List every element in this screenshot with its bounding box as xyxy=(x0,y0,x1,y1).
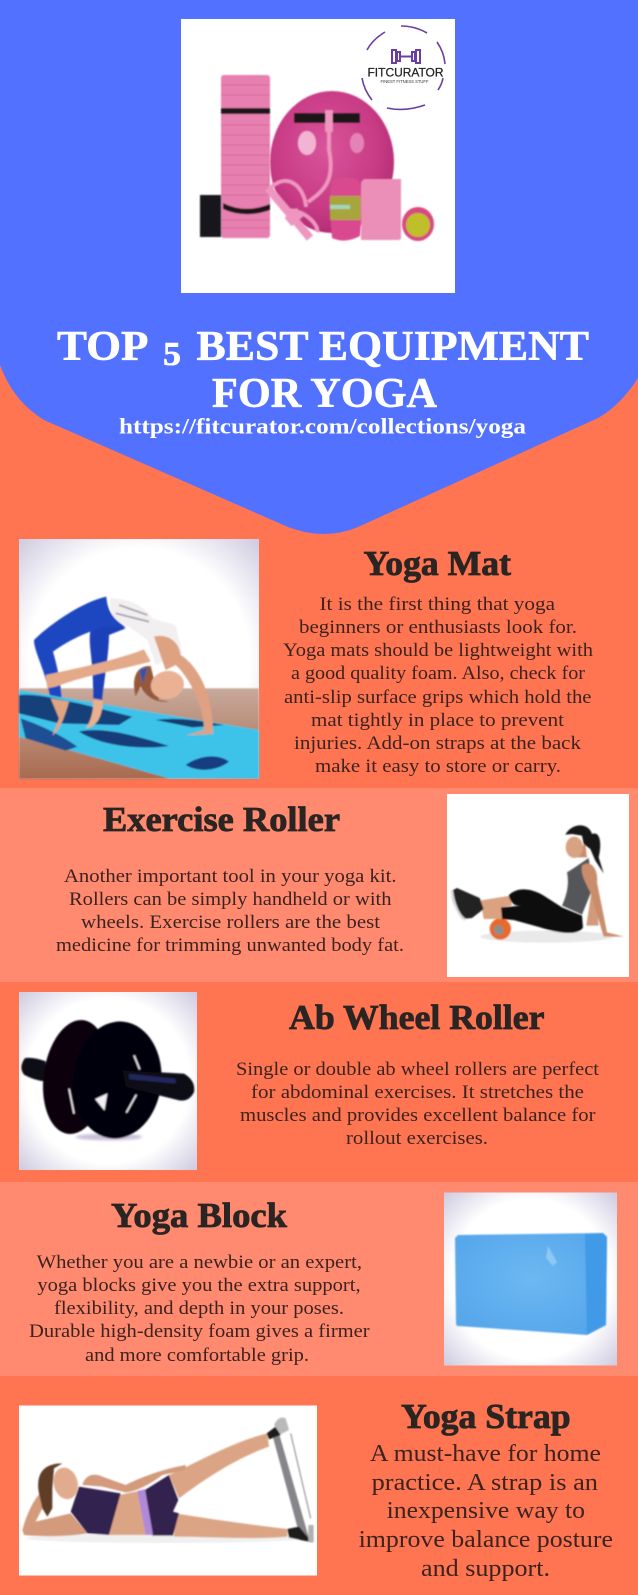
body: yoga mat: injuries. Add-on straps at the back xyxy=(294,733,582,754)
title: FOR YOGA xyxy=(212,370,437,417)
body: yoga block: flexibility, and depth in your poses. xyxy=(54,1298,344,1319)
heading: yoga strap: Yoga Strap xyxy=(401,1397,571,1436)
body: yoga mat: anti-slip surface grips which hold the xyxy=(284,687,592,708)
band: exercise roller background xyxy=(0,788,638,982)
icon: small ball case xyxy=(402,207,434,241)
body: yoga mat: mat tightly in place to prevent xyxy=(311,710,565,731)
body: yoga block: yoga blocks give you the extra support, xyxy=(37,1275,361,1296)
body: exercise roller: Rollers can be simply handheld or with xyxy=(69,889,392,910)
body: yoga mat: beginners or enthusiasts look for. xyxy=(299,617,577,638)
photo: exercise roller seated woman xyxy=(447,794,629,977)
panel: yoga block xyxy=(29,1192,617,1366)
heading: ab wheel roller: Ab Wheel Roller xyxy=(289,998,544,1037)
panel: exercise roller xyxy=(56,794,629,977)
title: 5 xyxy=(163,336,181,373)
photo: yoga mat backbend xyxy=(19,539,259,779)
body: yoga mat: make it easy to store or carry. xyxy=(315,756,561,777)
icon: exercise ball xyxy=(270,91,394,233)
heading: yoga block: Yoga Block xyxy=(111,1196,288,1235)
body: yoga strap: and support. xyxy=(421,1556,550,1582)
heading: yoga mat: Yoga Mat xyxy=(364,544,511,583)
body: ab wheel roller: muscles and provides excellent balance for xyxy=(240,1105,596,1126)
body: exercise roller: wheels. Exercise rollers are the best xyxy=(81,912,381,933)
icon: pedal resistance puller xyxy=(268,110,333,238)
body: yoga block: Whether you are a newbie or an expert, xyxy=(37,1252,362,1273)
photo: blue yoga block xyxy=(444,1192,617,1366)
logo: fitcurator: FITCURATOR xyxy=(368,66,444,80)
photo: ab wheel xyxy=(19,992,197,1170)
header product photo xyxy=(181,19,455,293)
logo: fitcurator xyxy=(362,26,445,109)
body: exercise roller xyxy=(56,866,404,956)
body: yoga strap xyxy=(359,1441,613,1582)
body: yoga block: Durable high-density foam gives a firmer xyxy=(29,1321,370,1342)
title: BEST EQUIPMENT xyxy=(196,323,589,370)
body: yoga mat xyxy=(283,594,594,777)
body: ab wheel roller: for abdominal exercises. It stretches the xyxy=(251,1082,584,1103)
body: yoga block xyxy=(29,1252,370,1366)
body: yoga strap: A must-have for home xyxy=(370,1441,601,1467)
body: ab wheel roller: Single or double ab wheel rollers are perfect xyxy=(236,1059,600,1080)
title: TOP xyxy=(57,323,148,370)
logo: fitcurator: FINEST FITNESS STUFF xyxy=(380,79,429,84)
icon: black wrap xyxy=(200,195,221,237)
body: ab wheel roller: rollout exercises. xyxy=(346,1128,488,1149)
icon: yoga block xyxy=(361,179,401,240)
url: https://fitcurator.com/collections/yoga xyxy=(119,414,526,438)
photo: yoga strap side-lying woman xyxy=(19,1406,317,1576)
body: yoga strap: improve balance posture xyxy=(359,1527,613,1553)
icon: rolled towel xyxy=(329,178,364,241)
body: yoga mat: It is the first thing that yoga xyxy=(320,594,556,615)
body: ab wheel roller xyxy=(236,1059,600,1149)
body: yoga strap: inexpensive way to xyxy=(387,1498,585,1524)
body: yoga strap: practice. A strap is an xyxy=(372,1470,598,1496)
body: exercise roller: medicine for trimming unwanted body fat. xyxy=(56,935,404,956)
title xyxy=(57,323,589,417)
body: yoga mat: a good quality foam. Also, check for xyxy=(291,663,586,684)
header: blue pennant shape xyxy=(0,0,638,534)
body: yoga block: and more comfortable grip. xyxy=(85,1345,309,1366)
heading: exercise roller: Exercise Roller xyxy=(103,800,340,839)
band: yoga block background xyxy=(0,1182,638,1376)
panel: yoga mat xyxy=(19,539,594,779)
body: yoga mat: Yoga mats should be lightweight with xyxy=(283,640,594,661)
body: exercise roller: Another important tool in your yoga kit. xyxy=(64,866,396,887)
panel: yoga strap xyxy=(19,1397,613,1582)
panel: ab wheel roller xyxy=(19,992,600,1170)
icon: rolled yoga mat xyxy=(221,75,270,238)
